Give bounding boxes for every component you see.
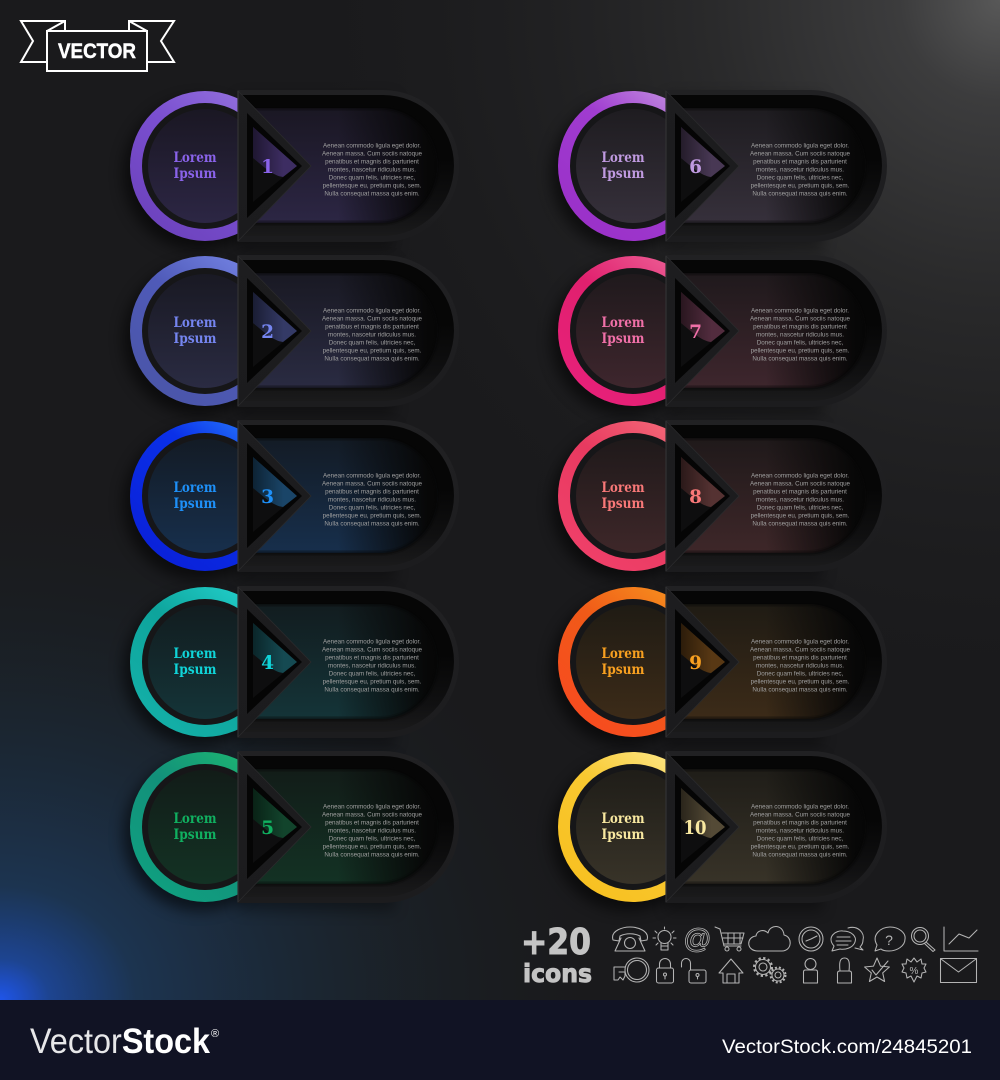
body text: Donec quam felis, ultricies nec, [329, 340, 416, 347]
icon: gears [754, 958, 786, 982]
heading: Ipsum [602, 166, 645, 182]
body text: Aenean commodo ligula eget dolor. [323, 143, 421, 150]
body text: pellentesque eu, pretium quis, sem. [323, 183, 422, 190]
body text: Nulla consequat massa quis enim. [324, 356, 420, 363]
body text: montes, nascetur ridiculus mus. [756, 663, 844, 670]
body text: montes, nascetur ridiculus mus. [328, 497, 416, 504]
body text: montes, nascetur ridiculus mus. [756, 332, 844, 339]
heading: Ipsum [174, 662, 217, 678]
icon: question bubble: ? [885, 932, 893, 948]
icon: shopping cart [715, 927, 744, 951]
body text: Aenean commodo ligula eget dolor. [751, 639, 849, 646]
body text: Aenean massa. Cum sociis natoque [322, 481, 423, 488]
number 2: 2 [261, 322, 274, 343]
heading: Ipsum [602, 827, 645, 843]
icon: envelope [940, 958, 976, 982]
icon: magnifier [912, 928, 935, 952]
body text: Aenean massa. Cum sociis natoque [322, 151, 423, 158]
icon: at sign: @ [683, 923, 712, 954]
heading: Lorem [174, 646, 217, 662]
heading [602, 150, 645, 182]
body text: Donec quam felis, ultricies nec, [757, 671, 844, 678]
body text: penatibus et magnis dis parturient [753, 820, 847, 827]
icon: cloud [749, 926, 790, 951]
icon: chat bubbles [831, 927, 863, 951]
body text: pellentesque eu, pretium quis, sem. [323, 679, 422, 686]
number 4: 4 [261, 653, 274, 674]
body text: penatibus et magnis dis parturient [753, 655, 847, 662]
body text: Nulla consequat massa quis enim. [752, 191, 848, 198]
label: +20 icons: icons [523, 959, 592, 988]
body text: Donec quam felis, ultricies nec, [329, 836, 416, 843]
panel: item 8 [551, 420, 887, 580]
number 3: 3 [261, 487, 274, 508]
body text: Aenean massa. Cum sociis natoque [322, 812, 423, 819]
body text: Aenean massa. Cum sociis natoque [750, 812, 851, 819]
panel: item 4 [123, 586, 459, 746]
heading: Lorem [174, 811, 217, 827]
heading [174, 811, 217, 843]
body text: Aenean massa. Cum sociis natoque [322, 647, 423, 654]
heading: Ipsum [602, 662, 645, 678]
body text: pellentesque eu, pretium quis, sem. [323, 844, 422, 851]
heading: Ipsum [174, 166, 217, 182]
body text: montes, nascetur ridiculus mus. [756, 497, 844, 504]
heading [174, 150, 217, 182]
icon set [613, 923, 978, 983]
body text: Nulla consequat massa quis enim. [752, 687, 848, 694]
body text: Aenean commodo ligula eget dolor. [751, 473, 849, 480]
heading [602, 315, 645, 347]
heading: Ipsum [602, 496, 645, 512]
body text: montes, nascetur ridiculus mus. [756, 828, 844, 835]
icon: telephone [613, 927, 647, 951]
body text: Nulla consequat massa quis enim. [324, 687, 420, 694]
icon: light bulb [653, 927, 676, 950]
body text: Donec quam felis, ultricies nec, [757, 836, 844, 843]
body text: penatibus et magnis dis parturient [325, 489, 419, 496]
heading: Ipsum [174, 331, 217, 347]
body text: Aenean commodo ligula eget dolor. [751, 308, 849, 315]
number 5: 5 [261, 818, 274, 839]
body text: Aenean commodo ligula eget dolor. [323, 639, 421, 646]
body text: Nulla consequat massa quis enim. [752, 521, 848, 528]
body text: pellentesque eu, pretium quis, sem. [323, 348, 422, 355]
body text: montes, nascetur ridiculus mus. [328, 332, 416, 339]
icon: open lock [682, 958, 706, 983]
icon: key [614, 958, 649, 982]
body text: Aenean massa. Cum sociis natoque [750, 481, 851, 488]
icon: percent burst: % [910, 966, 919, 977]
body text: penatibus et magnis dis parturient [753, 489, 847, 496]
heading [602, 811, 645, 843]
body text: montes, nascetur ridiculus mus. [756, 167, 844, 174]
heading: Ipsum [174, 496, 217, 512]
icon: closed lock [656, 959, 674, 983]
label: +20 icons [521, 922, 592, 988]
panel: item 1 [123, 90, 459, 250]
heading: Ipsum [174, 827, 217, 843]
heading [174, 315, 217, 347]
heading [174, 480, 217, 512]
body text: Aenean massa. Cum sociis natoque [750, 647, 851, 654]
panel: item 2 [123, 255, 459, 415]
image id: VectorStock.com/24845201 [722, 1037, 972, 1058]
heading: Ipsum [602, 331, 645, 347]
icon: man [804, 958, 818, 983]
body text: pellentesque eu, pretium quis, sem. [751, 348, 850, 355]
body text: Aenean massa. Cum sociis natoque [750, 316, 851, 323]
heading [174, 646, 217, 678]
body text: Donec quam felis, ultricies nec, [757, 175, 844, 182]
body text: Aenean commodo ligula eget dolor. [751, 804, 849, 811]
body text: pellentesque eu, pretium quis, sem. [751, 513, 850, 520]
body text: Aenean commodo ligula eget dolor. [323, 308, 421, 315]
heading: Lorem [602, 811, 645, 827]
body text: Nulla consequat massa quis enim. [324, 191, 420, 198]
body text: penatibus et magnis dis parturient [753, 159, 847, 166]
body text: Aenean massa. Cum sociis natoque [322, 316, 423, 323]
body text: montes, nascetur ridiculus mus. [328, 828, 416, 835]
number 1: 1 [261, 157, 274, 178]
icon: percent burst [902, 958, 926, 982]
body text: montes, nascetur ridiculus mus. [328, 663, 416, 670]
body text: Nulla consequat massa quis enim. [752, 852, 848, 859]
body text: pellentesque eu, pretium quis, sem. [751, 844, 850, 851]
icon: question bubble [875, 927, 905, 951]
body text: pellentesque eu, pretium quis, sem. [751, 183, 850, 190]
panel: item 9 [551, 586, 887, 746]
footer bar [0, 1000, 1000, 1080]
body text: Donec quam felis, ultricies nec, [757, 505, 844, 512]
body text: montes, nascetur ridiculus mus. [328, 167, 416, 174]
body text: Aenean commodo ligula eget dolor. [323, 804, 421, 811]
panel: item 5 [123, 751, 459, 911]
icon: house [719, 959, 743, 983]
number 7: 7 [689, 322, 702, 343]
heading [602, 646, 645, 678]
body text: Donec quam felis, ultricies nec, [329, 175, 416, 182]
icon: star badge [865, 958, 889, 982]
body text: Aenean commodo ligula eget dolor. [323, 473, 421, 480]
body text: penatibus et magnis dis parturient [325, 159, 419, 166]
logo: registered mark: ® [211, 1028, 219, 1040]
body text: Aenean commodo ligula eget dolor. [751, 143, 849, 150]
icon: woman [838, 958, 852, 983]
body text: penatibus et magnis dis parturient [753, 324, 847, 331]
panel: item 10 [551, 751, 887, 911]
body text: Nulla consequat massa quis enim. [752, 356, 848, 363]
number 9: 9 [689, 653, 702, 674]
body text: Aenean massa. Cum sociis natoque [750, 151, 851, 158]
heading: Lorem [174, 480, 217, 496]
heading: Lorem [602, 480, 645, 496]
label: +20 icons: +20 [521, 922, 591, 963]
body text: Donec quam felis, ultricies nec, [329, 671, 416, 678]
heading [602, 480, 645, 512]
body text: Nulla consequat massa quis enim. [324, 852, 420, 859]
body text: Donec quam felis, ultricies nec, [757, 340, 844, 347]
heading: Lorem [602, 315, 645, 331]
number 6: 6 [689, 157, 702, 178]
badge: vector ribbon [21, 21, 174, 71]
body text: Donec quam felis, ultricies nec, [329, 505, 416, 512]
body text: penatibus et magnis dis parturient [325, 324, 419, 331]
panel: item 7 [551, 255, 887, 415]
heading: Lorem [174, 150, 217, 166]
panel: item 6 [551, 90, 887, 250]
body text: Nulla consequat massa quis enim. [324, 521, 420, 528]
heading: Lorem [602, 150, 645, 166]
heading: Lorem [174, 315, 217, 331]
body text: pellentesque eu, pretium quis, sem. [751, 679, 850, 686]
heading: Lorem [602, 646, 645, 662]
number 8: 8 [689, 487, 702, 508]
badge: vector ribbon: VECTOR [58, 40, 136, 63]
logo: VectorStock: VectorStock [30, 1022, 210, 1061]
body text: penatibus et magnis dis parturient [325, 820, 419, 827]
number 10: 10 [684, 818, 706, 839]
body text: penatibus et magnis dis parturient [325, 655, 419, 662]
panel: item 3 [123, 420, 459, 580]
icon: line chart [944, 927, 978, 951]
icon: clock [799, 927, 823, 951]
body text: pellentesque eu, pretium quis, sem. [323, 513, 422, 520]
